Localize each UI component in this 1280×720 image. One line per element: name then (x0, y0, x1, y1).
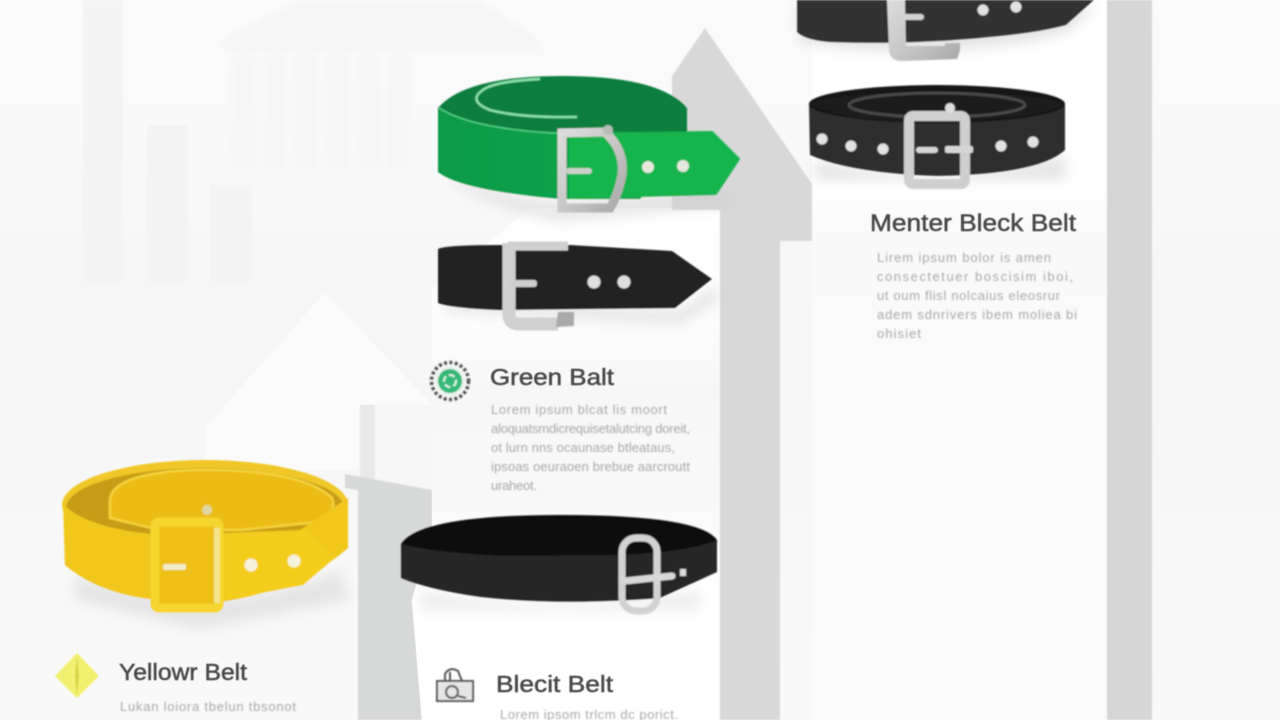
panel: black belt (401, 515, 717, 720)
text block: mentor black belt: Lirem ipsum bolor is amen (877, 250, 1051, 265)
text block: mentor black belt: consectetuer boscisim iboi, (877, 269, 1073, 284)
text block: mentor black belt (877, 250, 1077, 341)
grey right band (1107, 0, 1152, 720)
text block: mentor black belt: adem sdnrivers ibem moliea bi (877, 307, 1077, 322)
heading: black belt: Blecit Belt (496, 671, 614, 697)
heading: mentor black belt: Menter Bleck Belt (870, 210, 1076, 237)
white step column: right (812, 0, 1107, 720)
grey left arrow shaft (345, 405, 432, 720)
text block: mentor black belt: ohisiet (877, 326, 921, 341)
belt: black belt cropped at top (797, 0, 1096, 61)
panel: green belt (432, 76, 739, 493)
text block: yellow belt: Lukan loiora tbelun tbsonot (120, 699, 296, 714)
faint bar chart (83, 0, 252, 283)
text block: green belt: ipsoas oeuraoen brebue aarcroutt (491, 459, 690, 474)
panel: mentor black belt (797, 0, 1096, 341)
pale left arrow (205, 292, 432, 470)
text block: green belt: aloquatsmdicrequisetalutcing doreit, (491, 421, 690, 436)
faint building (222, 0, 540, 168)
icon: green gear badge (432, 362, 468, 400)
belt: green belt with buckle (438, 76, 739, 222)
white step column: centre (412, 208, 720, 720)
heading: green belt: Green Balt (490, 364, 615, 390)
belt: yellow belt with buckle (62, 460, 350, 630)
text block: green belt: uraheot. (491, 478, 537, 493)
belt: black belt oval (401, 515, 717, 611)
belt: mentor black belt (809, 85, 1065, 184)
belt: black belt under green (438, 243, 720, 327)
text block: green belt (491, 402, 690, 493)
panel: yellow belt (55, 460, 350, 714)
text block: green belt: ot lurn nns ocaunase btleataus, (491, 440, 675, 455)
heading: yellow belt: Yellowr Belt (119, 659, 248, 685)
grey centre arrow (672, 28, 812, 720)
text block: green belt: Lorem ipsum blcat lis moort (491, 402, 667, 417)
icon: black belt emblem (437, 669, 473, 701)
text block: mentor black belt: ut oum flisl nolcaius eleosrur (877, 288, 1061, 303)
icon: yellow diamond (55, 653, 99, 698)
